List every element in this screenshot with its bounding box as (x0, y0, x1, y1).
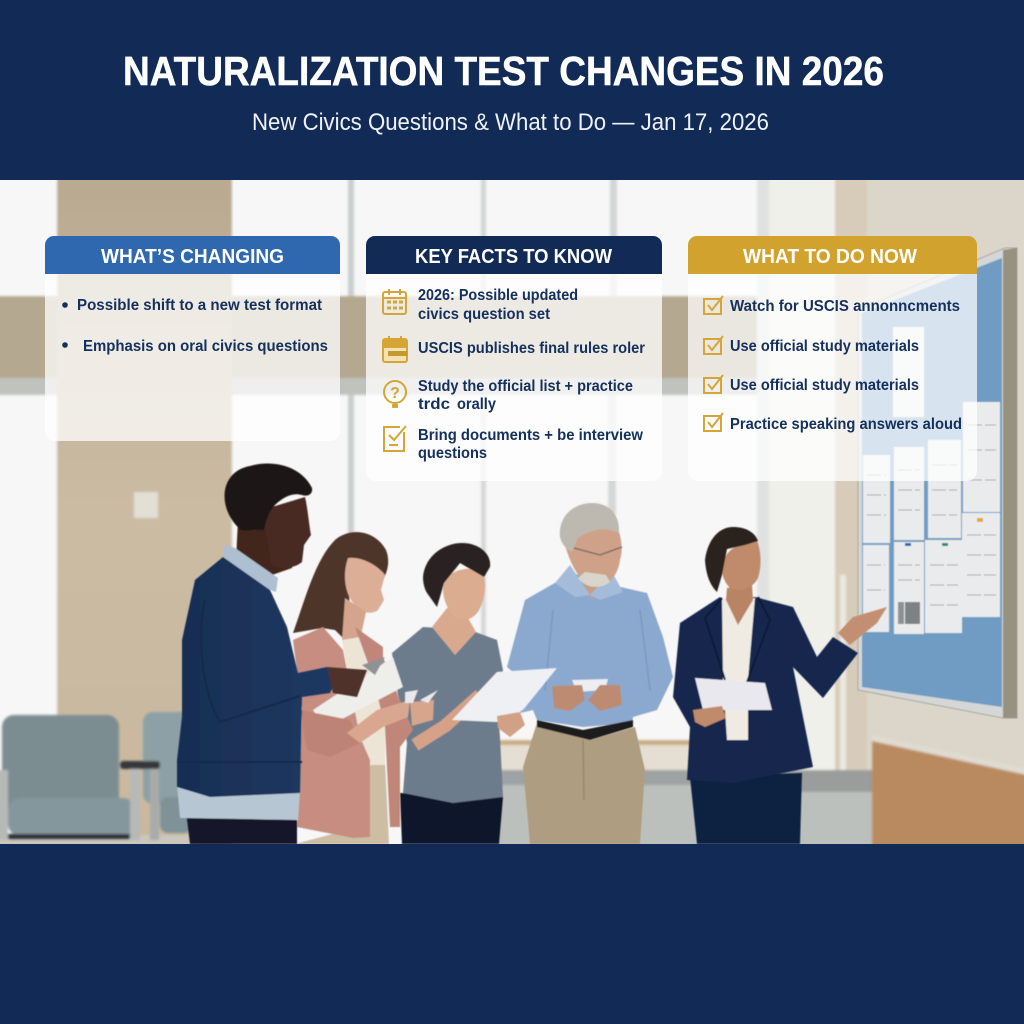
step: study materials repeated: Use official study materials (730, 377, 919, 394)
fact: study list: orally (457, 396, 496, 413)
icon: calendar (383, 289, 406, 314)
person: woman in pink blazer (293, 532, 438, 844)
fact: bring documents: Bring documents + be interview (418, 427, 644, 444)
person: man in navy sweater (177, 464, 367, 844)
photo: room background (0, 168, 1024, 856)
header band (0, 0, 1024, 180)
chairs (0, 712, 193, 840)
person: presenter in navy blazer (673, 527, 887, 844)
panel header: key facts (366, 236, 662, 274)
icon: filled calendar (383, 336, 407, 362)
footer band (0, 844, 1024, 1024)
panel header: what's changing (45, 236, 340, 274)
fact: study list: Study the official list + practice (418, 378, 633, 395)
bulletin board (858, 248, 1017, 718)
title: NATURALIZATION TEST CHANGES IN 2026 (123, 48, 884, 94)
step: watch announcements: Watch for USCIS annonncments (730, 298, 960, 315)
panel header: what to do now (688, 236, 977, 274)
person: woman in gray top (392, 543, 557, 844)
board papers (863, 327, 1000, 634)
fact: bring documents: questions (418, 445, 487, 462)
panel header: what's changing: WHAT’S CHANGING (101, 246, 284, 268)
subtitle: New Civics Questions & What to Do — Jan 17, 2026 (252, 109, 769, 136)
panel: what's changing (45, 236, 340, 441)
step: study materials: Use official study materials (730, 338, 919, 355)
icon: question bulb (384, 381, 406, 408)
fact: civics question set: 2026: Possible updated (418, 287, 578, 304)
icon: checklist (384, 426, 406, 451)
fact: study list (418, 378, 633, 413)
bullet: new test format: Possible shift to a new test format (77, 297, 323, 314)
person: older man in blue shirt (507, 503, 673, 844)
fact: civics question set: civics question set (418, 306, 551, 323)
bullet: oral civics: Emphasis on oral civics questions (83, 338, 328, 355)
panel: what to do now (688, 236, 977, 481)
icon: question bulb: ? (390, 385, 400, 402)
step: practice speaking: Practice speaking answers aloud (730, 416, 962, 433)
panel: key facts to know (366, 236, 662, 481)
panel header: what to do now: WHAT TO DO NOW (743, 246, 917, 268)
fact: bring documents (418, 427, 644, 462)
fact: study list: trdc (418, 396, 450, 413)
fact: final rules: USCIS publishes final rules roler (418, 340, 645, 357)
document held by woman in gray (452, 668, 557, 722)
fact: civics question set (418, 287, 578, 323)
panel header: key facts: KEY FACTS TO KNOW (415, 246, 612, 268)
